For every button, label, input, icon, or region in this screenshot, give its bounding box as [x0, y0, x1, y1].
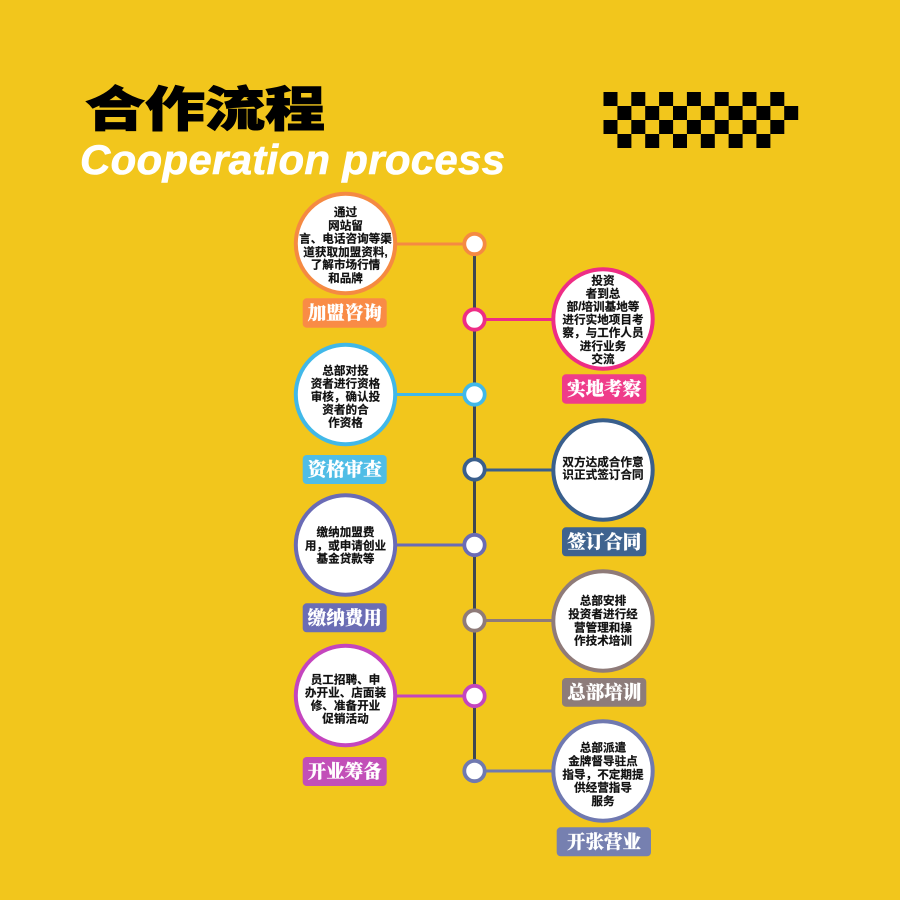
step 8: 开张营业: 供经营指导 [574, 780, 632, 794]
step 5: 缴纳费用: 缴纳费用 [308, 607, 382, 629]
step 3: 资格审查: 资者进行资格 [311, 376, 381, 390]
step 3: 资格审查: 作资格 [328, 416, 363, 430]
step 6: 总部培训 [464, 571, 653, 707]
step 8: 开张营业: 开张营业 [567, 832, 641, 853]
step 2: 实地考察 [464, 269, 653, 404]
step 3: 资格审查: 总部对投 [322, 363, 369, 377]
step 3: 资格审查: 资格审查 [308, 459, 382, 481]
step 3: 资格审查 [296, 345, 485, 484]
step 8: 开张营业: 服务 [591, 794, 615, 808]
step 3: 资格审查: 审核，确认投 [311, 389, 381, 403]
step 5: 缴纳费用: 用，或申请创业 [305, 538, 386, 552]
step 4: 签订合同: 签订合同 [567, 531, 641, 553]
step 7: 开业筹备: 修、准备开业 [311, 699, 381, 713]
step 7: 开业筹备: 员工招聘、申 [311, 672, 380, 686]
step 4: 签订合同 [464, 420, 653, 556]
step 2: 实地考察: 者到总 [586, 287, 621, 301]
step 2: 实地考察: 部/培训基地等 [567, 299, 640, 313]
step 1: 加盟咨询: 网站留 [328, 218, 363, 232]
subtitle: English heading: Cooperation process [80, 136, 505, 183]
step 6: 总部培训: 营管理和操 [574, 620, 632, 634]
step 5: 缴纳费用: 缴纳加盟费 [317, 525, 375, 539]
step 6: 总部培训: 作技术培训 [574, 633, 632, 647]
step 7: 开业筹备 [296, 646, 485, 786]
step 1: 加盟咨询: 道获取加盟资料, [303, 245, 388, 259]
step 1: 加盟咨询: 通过 [334, 205, 357, 219]
step 7: 开业筹备: 开业筹备 [308, 761, 382, 783]
step 2: 实地考察: 进行实地项目考 [562, 313, 644, 327]
step 2: 实地考察: 察，与工作人员 [562, 326, 644, 340]
step 6: 总部培训: 投资者进行经 [568, 607, 638, 621]
timeline spine [473, 244, 476, 771]
step 7: 开业筹备: 促销活动 [322, 712, 369, 726]
step 3: 资格审查: 资者的合 [322, 403, 369, 417]
step 1: 加盟咨询: 和品牌 [328, 271, 363, 285]
step 2: 实地考察: 交流 [591, 352, 615, 366]
step 2: 实地考察: 投资 [591, 273, 615, 287]
step 6: 总部培训: 总部培训 [567, 682, 641, 704]
step 1: 加盟咨询: 加盟咨询 [308, 303, 382, 324]
step 8: 开张营业: 指导，不定期提 [562, 767, 644, 781]
step 1: 加盟咨询 [296, 194, 485, 328]
icon: checkered pattern [604, 92, 798, 148]
step 4: 签订合同: 识正式签订合同 [562, 468, 644, 482]
step 7: 开业筹备: 办开业、店面装 [305, 686, 386, 700]
step 8: 开张营业: 总部派遣 [580, 741, 627, 755]
step 8: 开张营业 [464, 721, 653, 856]
step 8: 开张营业: 金牌督导驻点 [568, 754, 638, 768]
step 5: 缴纳费用 [296, 495, 485, 632]
step 2: 实地考察: 进行业务 [580, 339, 627, 353]
step 6: 总部培训: 总部安排 [580, 593, 627, 607]
step 4: 签订合同: 双方达成合作意 [562, 455, 644, 469]
step 2: 实地考察: 实地考察 [567, 378, 642, 400]
step 5: 缴纳费用: 基金贷款等 [317, 551, 375, 565]
title: Chinese heading: 合作流程 [85, 83, 325, 137]
step 1: 加盟咨询: 言、电话咨询等渠 [299, 232, 392, 246]
step 1: 加盟咨询: 了解市场行情 [311, 258, 381, 272]
